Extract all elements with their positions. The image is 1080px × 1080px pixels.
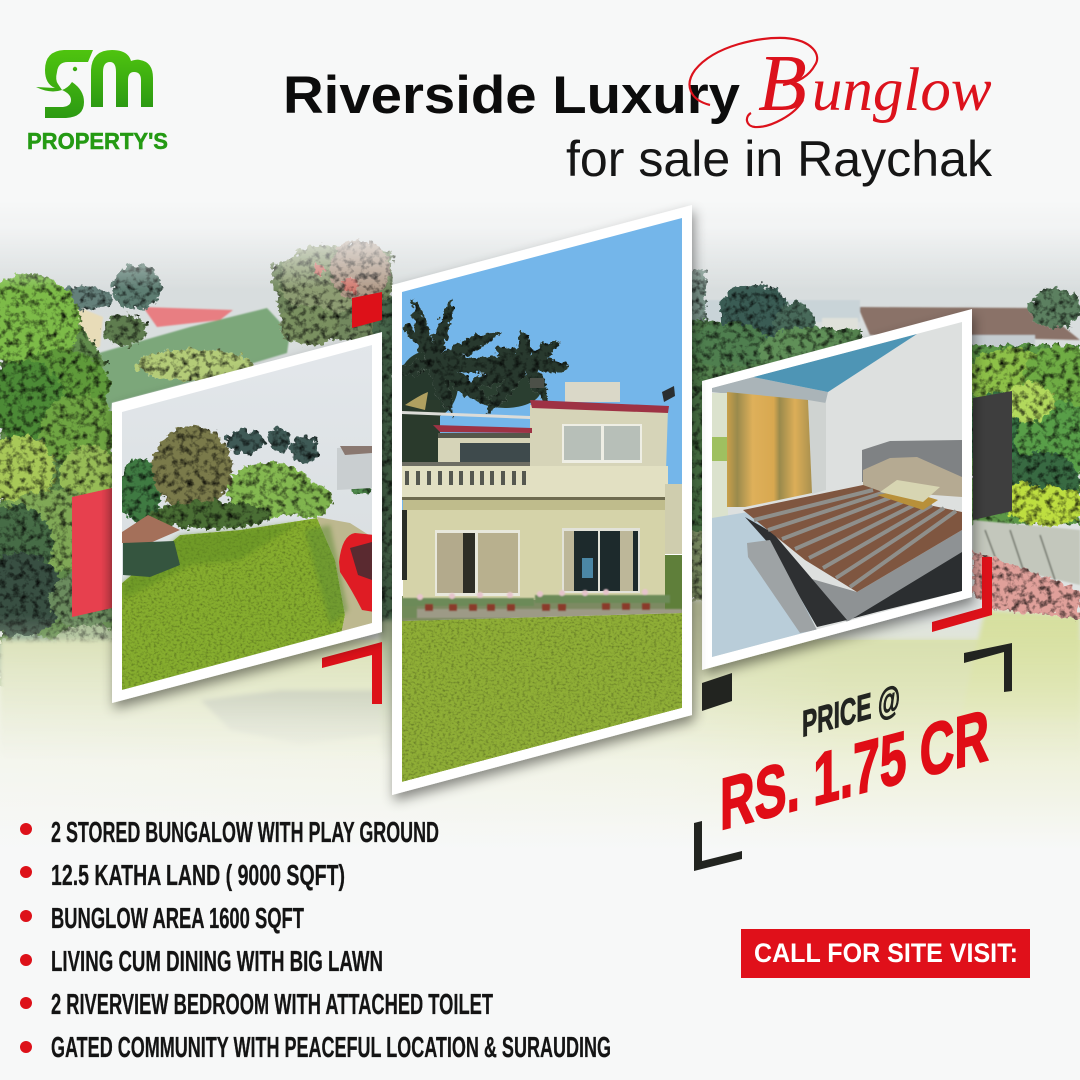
upper room <box>530 405 668 470</box>
foliage base masses <box>0 323 112 687</box>
ceiling <box>712 377 828 405</box>
feature 2 <box>20 860 345 892</box>
palms <box>398 305 566 462</box>
accent: red square behind centre photo <box>352 292 382 328</box>
accent: black square <box>702 673 732 711</box>
background: riverside garden scene <box>0 200 1080 760</box>
footboard <box>745 517 847 627</box>
price label: PRICE @ <box>802 677 900 745</box>
call to action button: CALL FOR SITE VISIT: <box>754 938 1018 968</box>
gazebo <box>122 515 180 577</box>
price block <box>720 677 989 846</box>
feature 6 <box>20 1032 611 1064</box>
accent: red corner bracket right <box>932 557 992 632</box>
logo: SM Property's <box>27 50 168 154</box>
rooftop tank and flood light <box>565 382 620 402</box>
title line one: Riverside Luxury <box>283 66 741 125</box>
neighbouring building <box>665 484 683 554</box>
feature 5 <box>20 989 493 1021</box>
feature 4 <box>20 946 383 978</box>
background: lawn tint behind price <box>0 620 1080 850</box>
red car <box>339 533 374 612</box>
quilt <box>743 485 962 592</box>
feature list <box>20 817 611 1064</box>
accent: left red panel <box>72 488 112 617</box>
window and side wall <box>712 393 728 518</box>
title <box>283 38 993 187</box>
left photo: garden lawn with gazebo <box>112 332 382 703</box>
balcony <box>402 462 530 466</box>
ground floor <box>403 500 665 600</box>
feature 5: 2 RIVERVIEW BEDROOM WITH ATTACHED TOILET <box>51 989 493 1021</box>
call to action button <box>741 929 1030 978</box>
flower pots and plinth <box>402 589 682 618</box>
floor <box>712 512 816 657</box>
lawn <box>402 613 682 782</box>
feature 6: GATED COMMUNITY WITH PEACEFUL LOCATION & SURAUDING <box>51 1032 611 1064</box>
feature 3: BUNGLOW AREA 1600 SQFT <box>51 903 304 935</box>
sheet <box>805 530 962 622</box>
curtains <box>727 392 812 507</box>
feature 4: LIVING CUM DINING WITH BIG LAWN <box>51 946 383 978</box>
logo text: PROPERTY'S <box>27 128 168 154</box>
accent: black corner bracket top right <box>964 643 1012 692</box>
headboard <box>862 440 962 482</box>
accent: black corner bracket bottom left <box>694 821 742 871</box>
feature 2: 12.5 KATHA LAND ( 9000 SQFT) <box>51 860 345 892</box>
feature 3 <box>20 903 304 935</box>
feature 1 <box>20 817 439 849</box>
script word: Bunglow <box>758 40 992 128</box>
script word flourish <box>690 38 817 127</box>
right photo: bedroom <box>702 309 972 670</box>
logo mark: S with elephant trunk <box>36 50 153 118</box>
left room <box>402 411 530 419</box>
lawn and path <box>317 517 372 640</box>
feature 1: 2 STORED BUNGALOW WITH PLAY GROUND <box>51 817 439 849</box>
title line two: for sale in Raychak <box>566 131 993 187</box>
under bed <box>847 550 962 620</box>
centre photo: bungalow house <box>392 205 692 795</box>
accent: dark panel right <box>973 391 1012 520</box>
accent: red corner bracket near left photo <box>322 642 382 704</box>
pillows <box>877 494 938 510</box>
